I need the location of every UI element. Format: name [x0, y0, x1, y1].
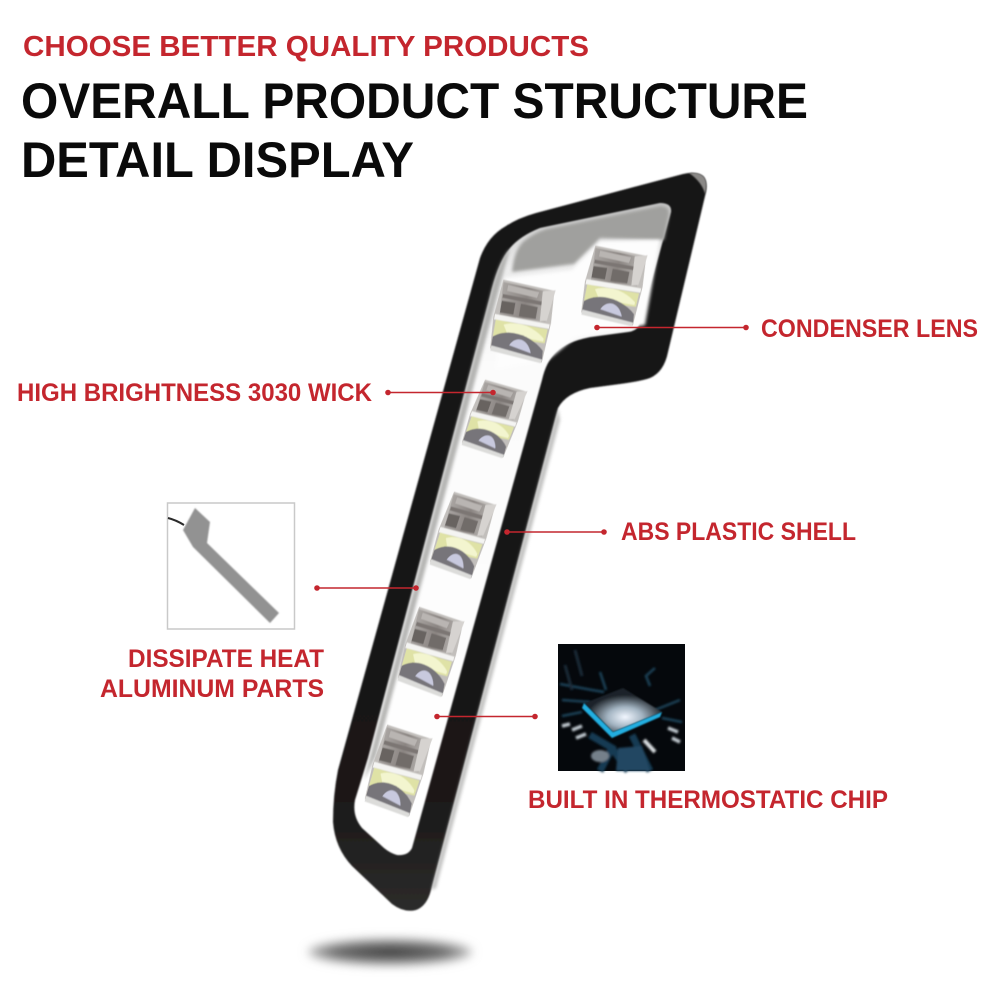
- callout: dissipate heat aluminum parts: DISSIPATE HEAT: [128, 645, 324, 673]
- housing tip highlight: [689, 173, 706, 194]
- callout: condenser lens: CONDENSER LENS: [761, 315, 978, 343]
- LED module 4: [426, 491, 498, 580]
- callout: ABS plastic shell: ABS PLASTIC SHELL: [621, 518, 856, 546]
- housing outer grey rim: [431, 408, 560, 890]
- LED module 3: [458, 379, 529, 459]
- callout: ABS plastic shell: [504, 518, 856, 546]
- glass top grey zone: [512, 206, 669, 272]
- main title: OVERALL PRODUCT STRUCTURE: [21, 73, 808, 129]
- lamp housing: [333, 173, 707, 911]
- glass bright reflection: [495, 240, 660, 370]
- callout: built in thermostatic chip: [434, 714, 888, 814]
- clear lens window: [354, 203, 671, 855]
- main title: [21, 73, 808, 188]
- callout: condenser lens: [594, 315, 978, 343]
- LED module 6: [361, 724, 434, 818]
- icon: circuit chip inset: [558, 644, 685, 771]
- inner rim shading: [364, 248, 510, 780]
- callout: high brightness 3030 wick: HIGH BRIGHTNESS 3030 WICK: [17, 379, 372, 407]
- ground shadow: [308, 939, 472, 965]
- callout: dissipate heat aluminum parts: ALUMINUM PARTS: [100, 675, 324, 703]
- callout: dissipate heat aluminum parts: [100, 585, 419, 703]
- LED module 1: [487, 279, 557, 364]
- icon: aluminum part inset: [168, 503, 294, 629]
- product: LED daytime running light: [333, 173, 707, 911]
- small heading: CHOOSE BETTER QUALITY PRODUCTS: [23, 31, 589, 63]
- LED module 5: [394, 606, 466, 698]
- LED module 2: [578, 245, 649, 327]
- callout: built in thermostatic chip: BUILT IN THERMOSTATIC CHIP: [528, 786, 888, 814]
- main title: DETAIL DISPLAY: [21, 132, 414, 188]
